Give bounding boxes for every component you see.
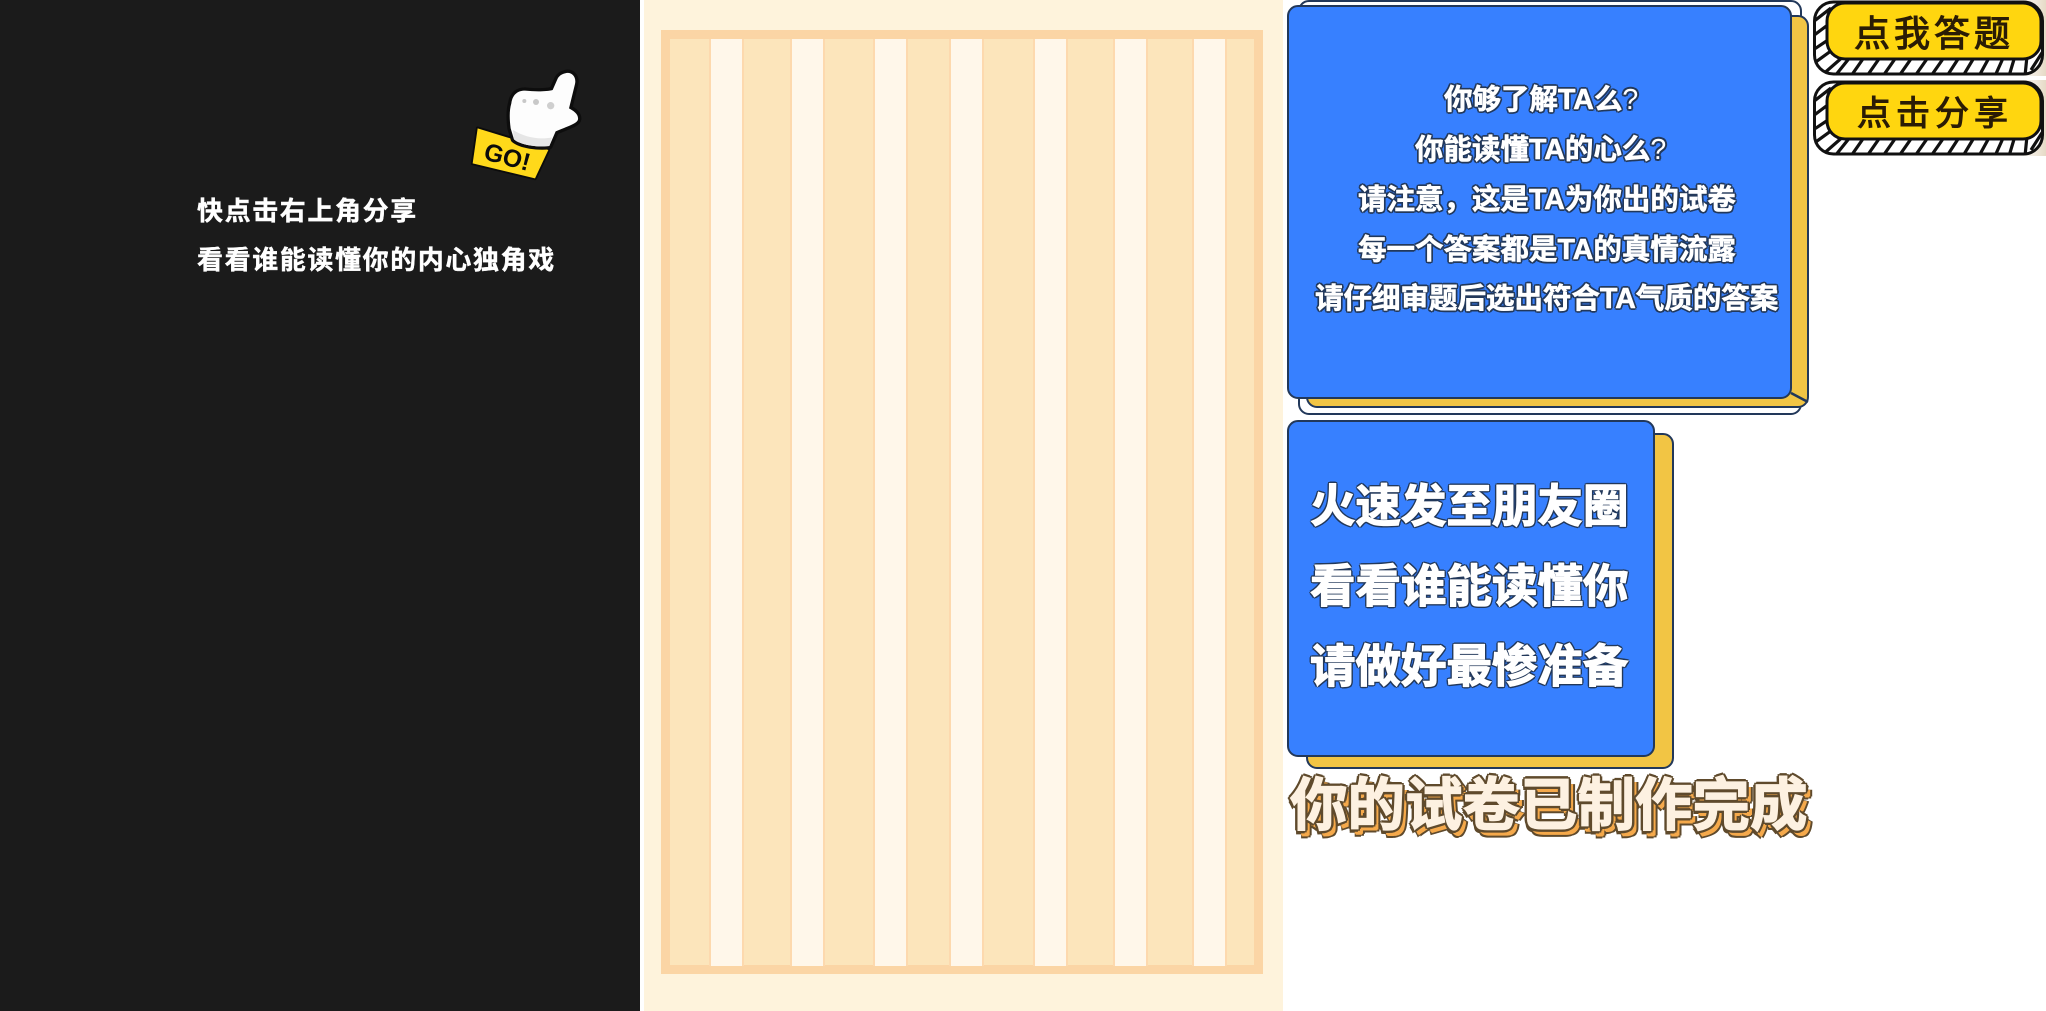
blue front card [1287, 5, 1792, 399]
heading: paper finished: 你的试卷已制作完成 [1290, 774, 1808, 838]
yellow back sheet [1306, 15, 1809, 408]
text: intro line 1: 你够了解TA么? [1444, 84, 1638, 116]
striped paper frame [661, 30, 1263, 974]
panel: dark share screen [0, 0, 640, 1011]
button label: 点击分享 [1857, 86, 2013, 135]
text: intro line 4: 每一个答案都是TA的真情流露 [1358, 234, 1736, 266]
blue front card [1287, 420, 1655, 757]
text: intro line 3: 请注意，这是TA为你出的试卷 [1358, 184, 1736, 216]
text: share prompt line 1: 火速发至朋友圈 [1310, 481, 1629, 532]
fold line [1790, 392, 1809, 404]
text: intro line 5: 请仔细审题后选出符合TA气质的答案 [1315, 283, 1778, 315]
button graphic [1813, 0, 2046, 76]
button graphic [1813, 80, 2046, 156]
icon: pointing hand with GO label: GO! [481, 139, 533, 177]
button: answer the quiz [1813, 0, 2046, 76]
white back sheet [1298, 0, 1802, 415]
panel: intro card with layered backing [1287, 0, 1809, 415]
panel: cream background with striped paper [644, 0, 1283, 1011]
button label: 点我答题 [1854, 5, 2014, 57]
text: share instruction line 2: 看看谁能读懂你的内心独角戏 [197, 245, 556, 275]
button: share [1813, 80, 2046, 156]
text: share instruction line 1: 快点击右上角分享 [197, 196, 418, 226]
text: intro line 2: 你能读懂TA的心么? [1415, 134, 1666, 166]
yellow back sheet [1306, 433, 1674, 769]
panel: share prompt card [1287, 420, 1674, 769]
text: share prompt line 3: 请做好最惨准备 [1310, 641, 1629, 692]
icon: pointing hand with GO label [471, 70, 582, 180]
text: share prompt line 2: 看看谁能读懂你 [1310, 561, 1629, 612]
